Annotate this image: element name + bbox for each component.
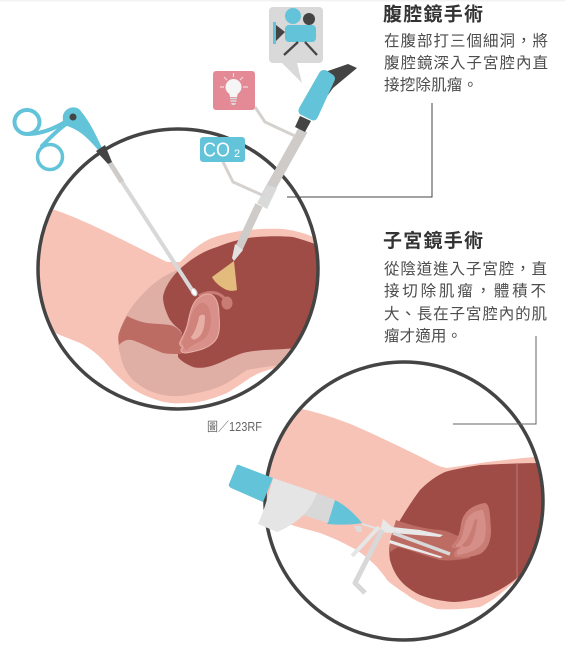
connector: CO2 tube — [223, 162, 262, 195]
text block: laparoscopy: 接挖除肌瘤。 — [384, 76, 478, 94]
text block: hysteroscopy: 瘤才適用。 — [384, 327, 462, 345]
heading: laparoscopic surgery: 腹腔鏡手術 — [383, 2, 483, 26]
connector: light cable — [255, 107, 295, 136]
icon: CO2 label: CO — [203, 140, 230, 162]
instrument: laparoscope — [232, 64, 357, 261]
instrument: hysteroscope — [229, 465, 362, 532]
fallopian tube and ovary — [199, 292, 224, 298]
icon: CO2 label — [200, 137, 245, 162]
body skin — [30, 205, 325, 403]
instrument: laparoscopic scissors — [14, 107, 198, 297]
vaginal canal — [390, 520, 470, 560]
text block: hysteroscopy: 大、長在子宮腔內的肌 — [384, 305, 547, 323]
abdominal cavity — [163, 236, 325, 368]
uterine cavity — [191, 315, 205, 340]
uterus — [180, 294, 219, 353]
icon: light bulb — [213, 71, 255, 110]
heading: hysteroscopic surgery: 子宮鏡手術 — [383, 229, 483, 252]
text block: laparoscopy: 在腹部打三個細洞，將 — [384, 32, 548, 50]
panel: hysteroscopy anatomy circle — [255, 362, 550, 640]
circle outline — [38, 129, 318, 409]
abdominal cavity — [389, 463, 550, 602]
text block: hysteroscopy: 接切除肌瘤，體積不 — [384, 282, 546, 300]
body skin — [255, 409, 550, 609]
uterus — [452, 503, 491, 558]
image credit: 圖／123RF — [207, 420, 262, 434]
panel: laparoscopy anatomy circle — [30, 129, 325, 409]
circle outline — [265, 362, 543, 640]
vertical seam — [516, 463, 518, 578]
text block: hysteroscopy — [383, 229, 547, 345]
leader line: laparoscopy — [287, 103, 432, 197]
vaginal canal — [118, 316, 186, 354]
text block: laparoscopy — [383, 2, 548, 94]
icon: video camera bubble — [269, 7, 323, 83]
leader line: hysteroscopy — [453, 336, 536, 424]
instrument: speculum — [352, 519, 450, 593]
pelvic tissue — [118, 270, 291, 396]
uterine cavity — [456, 510, 486, 555]
icon: CO2 label: 2 — [234, 148, 240, 160]
text block: laparoscopy: 腹腔鏡深入子宮腔內直 — [384, 53, 548, 72]
text block: hysteroscopy: 從陰道進入子宮腔，直 — [384, 260, 547, 278]
cone of tissue at scope tip — [212, 261, 237, 291]
